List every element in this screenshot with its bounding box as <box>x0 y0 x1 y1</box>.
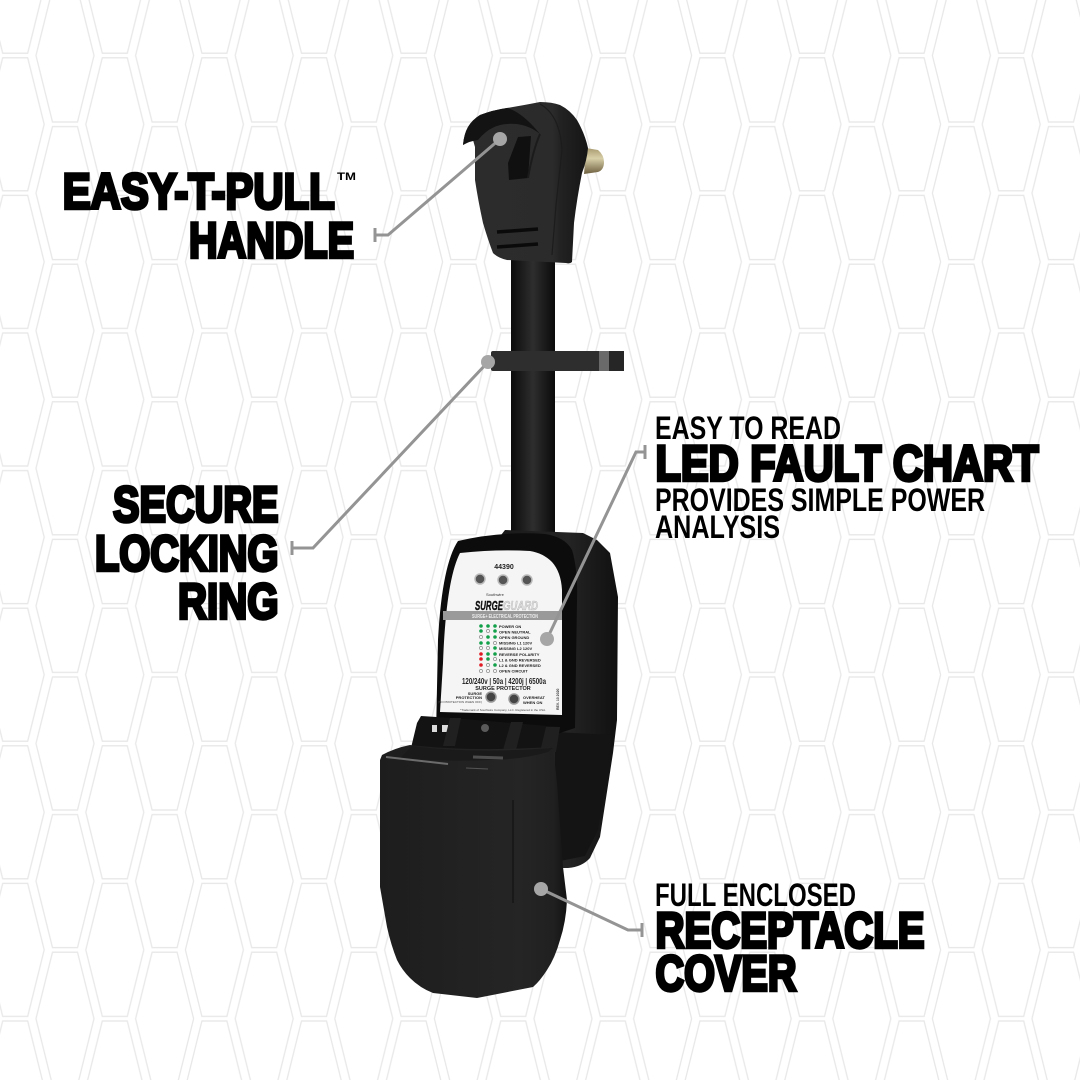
cover hinge <box>410 716 560 752</box>
LED fault chart label: GUARD <box>503 598 538 613</box>
power cord <box>511 255 555 540</box>
label: LED fault chart <box>655 410 1038 545</box>
LED fault chart label: PROTECTION <box>456 695 482 700</box>
LED rows: L2 & GND REVERSED <box>499 663 541 668</box>
status lamps <box>486 692 519 704</box>
label: LED fault chart: EASY TO READ <box>655 410 841 446</box>
LED fault chart label: WHEN ON <box>523 700 542 705</box>
front housing <box>436 533 577 735</box>
label: secure locking ring: SECURE <box>113 476 278 532</box>
label: Easy-T-Pull handle: TM <box>337 171 356 183</box>
label: secure locking ring: RING <box>178 573 278 629</box>
label: LED fault chart: ANALYSIS <box>655 509 780 545</box>
LED rows: OPEN NEUTRAL <box>499 630 531 634</box>
callout line: handle <box>375 132 507 242</box>
label: receptacle cover: RECEPTACLE <box>656 902 924 958</box>
LED fault chart label <box>438 550 562 715</box>
indicator lamps <box>475 574 532 585</box>
label: receptacle cover <box>655 877 924 1001</box>
LED fault chart label: SURGE <box>468 691 482 696</box>
LED rows: OPEN GROUND <box>499 635 529 640</box>
label: Easy-T-Pull handle: EASY-T-PULL <box>63 163 335 219</box>
LED fault chart label: SURGE PROTECTOR <box>475 686 531 692</box>
LED fault chart label: OVERHEAT <box>523 695 545 700</box>
LED fault chart label: SURGE+ ELECTRICAL PROTECTION <box>472 614 538 620</box>
LED fault chart label: 120/240v | 50a | 4200j | 6500a <box>462 676 546 686</box>
label: receptacle cover: COVER <box>656 945 796 1001</box>
LED fault chart label: (NO PROTECTION WHEN OFF) <box>438 700 482 704</box>
recess under front housing <box>555 732 612 862</box>
brass pin <box>584 148 604 174</box>
LED rows: MISSING L1 120V <box>499 640 532 646</box>
label: Easy-T-Pull handle <box>63 163 356 268</box>
receptacle cover <box>380 745 567 998</box>
callout line: LED fault chart <box>540 445 645 646</box>
label: secure locking ring <box>95 476 278 629</box>
locking ring <box>491 351 624 371</box>
callout line: locking ring <box>292 355 495 555</box>
LED rows: POWER ON <box>499 624 521 629</box>
label: Easy-T-Pull handle: HANDLE <box>189 212 354 268</box>
SurgeGuard logo: SURGE <box>475 598 503 613</box>
LED fault chart label: Southwire <box>486 592 505 597</box>
LED fault chart label: REV. 10 2020 <box>556 688 560 710</box>
LED rows: OPEN CIRCUIT <box>499 668 528 674</box>
LED fault chart label: *Trademark of Southwire Company, LLC. Registered in the USA. <box>460 708 546 712</box>
back housing <box>450 530 618 868</box>
label: secure locking ring: LOCKING <box>95 525 278 581</box>
label: LED fault chart: PROVIDES SIMPLE POWER <box>655 482 985 518</box>
LED fault chart label: 44390 <box>494 564 514 571</box>
LED rows: REVERSE POLARITY <box>499 652 540 657</box>
LED rows: L1 & GND REVERSED <box>499 658 541 662</box>
LED rows: MISSING L2 120V <box>499 646 532 651</box>
plug handle <box>463 102 588 263</box>
surge protector device <box>380 102 624 998</box>
LED rows <box>479 624 541 674</box>
callout line: receptacle cover <box>534 882 642 937</box>
label: receptacle cover: FULL ENCLOSED <box>655 877 856 913</box>
